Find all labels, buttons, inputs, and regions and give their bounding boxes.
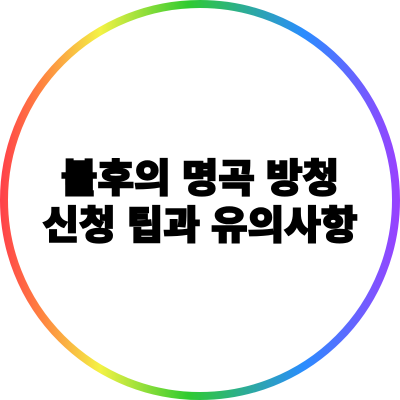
title: 신청 팁과 유의사항 xyxy=(43,205,357,248)
title xyxy=(42,158,358,248)
title: 불후의 명곡 방청 xyxy=(61,158,339,201)
